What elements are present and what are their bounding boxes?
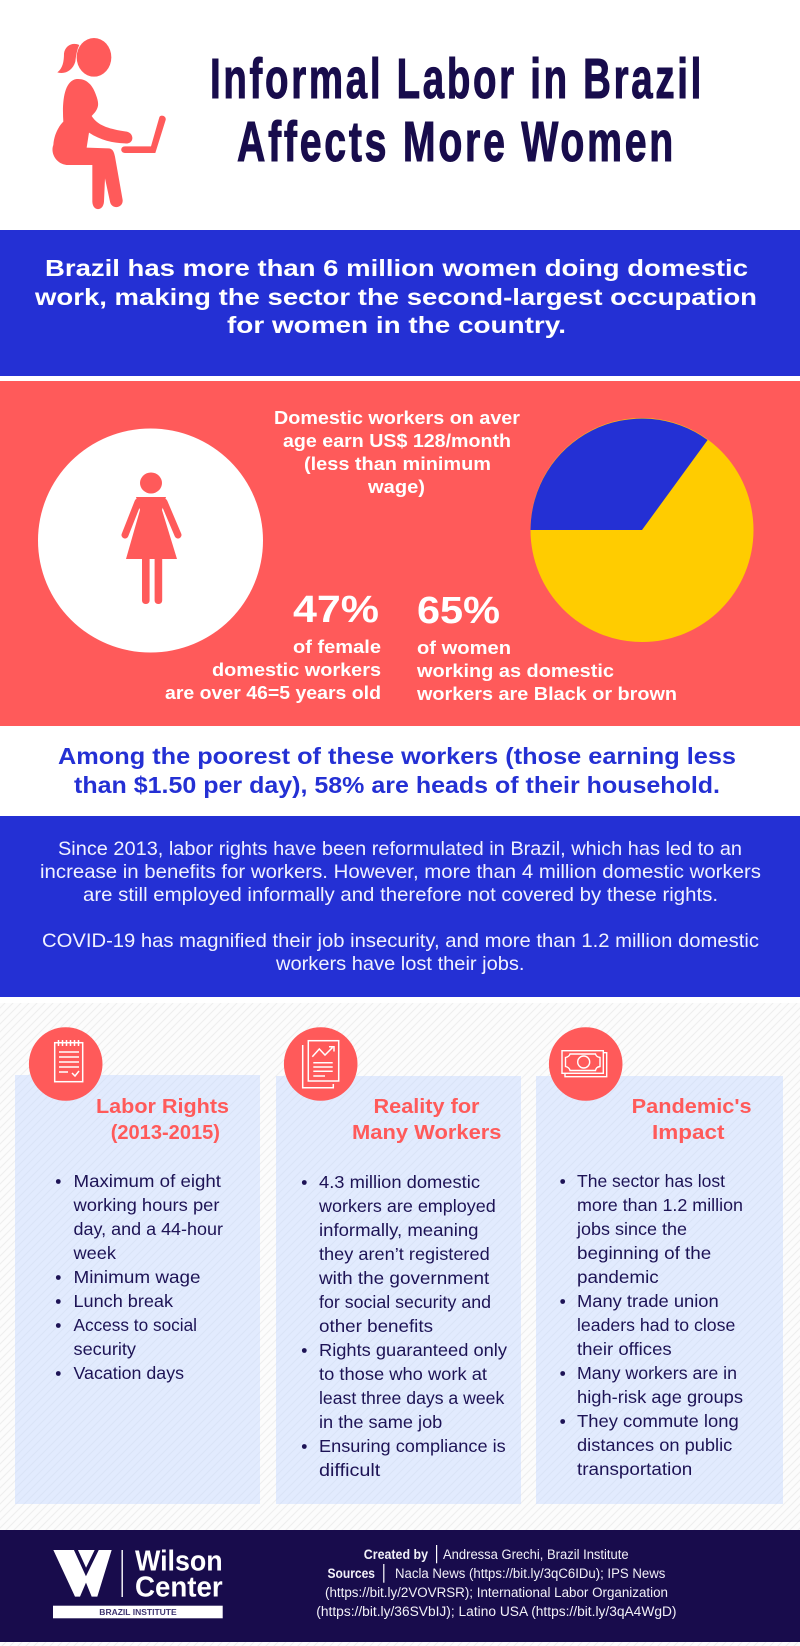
- heading: [632, 1095, 752, 1144]
- stat: 47 percent: are over 46=5 years old: [165, 683, 381, 703]
- bullet list: their offices: [577, 1339, 672, 1359]
- bullet list: Many trade union: [577, 1291, 719, 1311]
- panel: statistics: [0, 381, 800, 726]
- bullet list: distances on public: [577, 1435, 733, 1455]
- heading: Pandemic's: [632, 1095, 752, 1118]
- bullet list: other benefits: [319, 1316, 433, 1336]
- bullet list: workers are employed: [318, 1196, 496, 1216]
- bullet list: informally, meaning: [319, 1220, 478, 1240]
- callout: poorest workers: Among the poorest of these workers (those earning less: [58, 743, 736, 769]
- bullet list: [56, 1171, 223, 1383]
- pie chart: [530, 418, 754, 642]
- text: credits and sources: Nacla News (https://bit.ly/3qC6IDu); IPS News: [395, 1566, 666, 1581]
- bullet list: Rights guaranteed only: [319, 1340, 507, 1360]
- bullet list: they aren’t registered: [319, 1244, 490, 1264]
- bullet list: [302, 1172, 507, 1480]
- panel: intro band: work, making the sector the second-largest occupation: [34, 284, 757, 310]
- bullet list: more than 1.2 million: [577, 1195, 743, 1215]
- bullet list: Vacation days: [74, 1363, 184, 1383]
- stat: 65 percent: 65%: [417, 590, 500, 632]
- bullet list: The sector has lost: [577, 1171, 725, 1191]
- bullet list: 4.3 million domestic: [319, 1172, 480, 1192]
- bullet list: for social security and: [319, 1292, 491, 1312]
- bullet list: pandemic: [577, 1267, 659, 1287]
- bullet list: Access to social: [74, 1315, 197, 1335]
- stat: 47 percent: [165, 589, 381, 703]
- panel: intro band: for women in the country.: [227, 312, 566, 338]
- bullet list: jobs since the: [576, 1219, 687, 1239]
- panel: footer: [0, 1530, 800, 1642]
- title: [210, 47, 704, 174]
- bullet list: Lunch break: [74, 1291, 173, 1311]
- icon: report document: [284, 1027, 358, 1101]
- bullet list: least three days a week: [319, 1388, 505, 1408]
- panel: reality card: [276, 1027, 521, 1504]
- text: credits and sources: Sources: [328, 1566, 375, 1581]
- bullet list: with the government: [318, 1268, 489, 1288]
- heading: Many Workers: [352, 1121, 502, 1144]
- bullet list: day, and a 44-hour: [74, 1219, 223, 1239]
- heading: Labor Rights: [96, 1095, 229, 1118]
- text: credits and sources: (https://bit.ly/2VOVRSR); International Labor Organization: [325, 1585, 668, 1600]
- bullet list: Maximum of eight: [74, 1171, 221, 1191]
- stat: 65 percent: of women: [417, 638, 511, 658]
- bullet list: in the same job: [319, 1412, 442, 1432]
- stat: 65 percent: [416, 590, 677, 704]
- panel: intro band: [0, 230, 800, 376]
- heading: [96, 1095, 229, 1144]
- panel: labor rights card: [15, 1027, 260, 1504]
- stat: 47 percent: domestic workers: [212, 660, 381, 680]
- panel: labor rights summary: [0, 816, 800, 997]
- icon: banknotes: [549, 1027, 622, 1101]
- bullet list: to those who work at: [319, 1364, 487, 1384]
- bullet list: difficult: [319, 1460, 380, 1480]
- heading: Reality for: [374, 1095, 480, 1118]
- bullet list: security: [74, 1339, 136, 1359]
- logo: Wilson Center Brazil Institute: Center: [135, 1572, 223, 1604]
- bullet list: transportation: [577, 1459, 692, 1479]
- stat: 65 percent: working as domestic: [416, 661, 614, 681]
- icon: notepad: [29, 1027, 103, 1101]
- bullet list: Many workers are in: [577, 1363, 737, 1383]
- logo: Wilson Center Brazil Institute: [53, 1546, 223, 1618]
- text: average earnings: [274, 408, 520, 497]
- logo: Wilson Center Brazil Institute: Wilson: [135, 1546, 223, 1578]
- panel: labor rights summary: increase in benefits for workers. However, more than 4 million domestic workers: [40, 861, 761, 883]
- text: average earnings: Domestic workers on aver: [274, 408, 520, 428]
- panel: labor rights summary: workers have lost their jobs.: [275, 953, 524, 975]
- bullet list: Ensuring compliance is: [319, 1436, 506, 1456]
- bullet list: high-risk age groups: [577, 1387, 743, 1407]
- bullet list: leaders had to close: [577, 1315, 735, 1335]
- panel: labor rights summary: COVID-19 has magnified their job insecurity, and more than 1.2 million domestic: [42, 930, 759, 952]
- text: credits and sources: Andressa Grechi, Brazil Institute: [443, 1547, 629, 1562]
- callout: poorest workers: [58, 743, 736, 798]
- panel: labor rights summary: Since 2013, labor rights have been reformulated in Brazil, which has led to an: [58, 838, 742, 860]
- text: credits and sources: Created by: [364, 1547, 428, 1562]
- bullet list: week: [72, 1243, 116, 1263]
- text: credits and sources: [316, 1545, 676, 1619]
- bullet list: They commute long: [577, 1411, 739, 1431]
- text: average earnings: wage): [367, 477, 425, 497]
- icon: seated woman with laptop: [52, 38, 166, 209]
- bullet list: working hours per: [72, 1195, 220, 1215]
- bullet list: [560, 1171, 743, 1479]
- panel: pandemic card: [536, 1027, 783, 1504]
- text: average earnings: age earn US$ 128/month: [283, 431, 511, 451]
- bullet list: Minimum wage: [74, 1267, 200, 1287]
- stat: 47 percent: of female: [293, 637, 381, 657]
- panel: intro band: Brazil has more than 6 million women doing domestic: [45, 255, 748, 281]
- heading: (2013-2015): [111, 1121, 220, 1144]
- icon: woman in white circle: [38, 428, 263, 652]
- logo: Wilson Center Brazil Institute: BRAZIL INSTITUTE: [99, 1608, 177, 1617]
- panel: labor rights summary: are still employed informally and therefore not covered by these rights.: [83, 884, 718, 906]
- bullet list: beginning of the: [577, 1243, 711, 1263]
- stat: 47 percent: 47%: [293, 589, 379, 631]
- text: average earnings: (less than minimum: [304, 454, 491, 474]
- heading: Impact: [652, 1121, 725, 1144]
- heading: [352, 1095, 502, 1144]
- text: credits and sources: (https://bit.ly/36SVbIJ); Latino USA (https://bit.ly/3qA4WgD): [316, 1604, 676, 1619]
- stat: 65 percent: workers are Black or brown: [416, 684, 677, 704]
- hatched background: [0, 1003, 800, 1646]
- callout: poorest workers: than $1.50 per day), 58% are heads of their household.: [74, 772, 720, 798]
